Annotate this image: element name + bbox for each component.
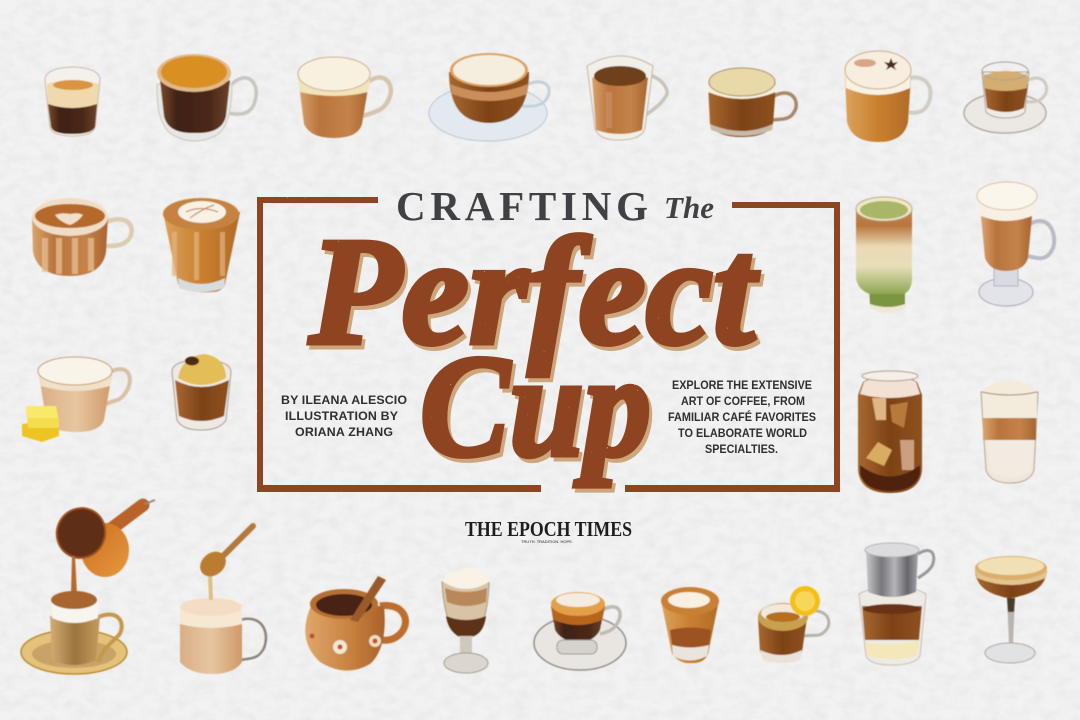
- cup: honey latte with dipper: [180, 526, 266, 674]
- byline: BY ILEANA ALESCIO: [281, 393, 407, 407]
- cup: coffee with lemon slice: [758, 586, 829, 663]
- cup: espresso martini: [975, 556, 1047, 663]
- title frame: [257, 197, 840, 492]
- logo: The Epoch Times: TRUTH. TRADITION. HOPE.: [521, 539, 573, 544]
- cup: espresso glass: [45, 67, 100, 136]
- heading: Crafting The: CRAFTING: [396, 183, 648, 229]
- intro text: TO ELABORATE WORLD: [678, 428, 807, 440]
- icon: phin filter: [865, 543, 934, 597]
- cup: affogato: [172, 354, 231, 430]
- title main lettering: Perfect: [308, 207, 759, 377]
- cup: small espresso on saucer: [964, 62, 1047, 133]
- cup: layered latte macchiato: [981, 380, 1038, 483]
- title main lettering: [308, 207, 759, 487]
- byline: ORIANA ZHANG: [295, 425, 393, 439]
- cup: flat white mug: [298, 57, 391, 138]
- intro text: [668, 380, 816, 456]
- byline: [281, 393, 407, 439]
- byline: ILLUSTRATION BY: [285, 409, 399, 423]
- logo: The Epoch Times: THE EPOCH TIMES: [465, 517, 632, 541]
- cup: tall glass mug: [587, 56, 667, 140]
- cup: turkish coffee poured from cezve: [21, 500, 155, 674]
- title shadow: Perfect: [311, 211, 762, 381]
- cup: matcha latte: [856, 197, 912, 313]
- cup: latte art tumbler: [163, 198, 240, 292]
- cup: butter coffee with butter cubes: [22, 357, 130, 442]
- title: Perfect Cup: [308, 207, 762, 491]
- cup: vienna coffee with whipped cream: [442, 567, 489, 673]
- cup: iced coffee can glass: [858, 371, 922, 493]
- cup: double-wall glass black coffee: [157, 54, 256, 141]
- cup: espresso on saucer: [534, 592, 626, 670]
- title shadow: Cup: [423, 329, 654, 491]
- intro text: ART OF COFFEE, FROM: [681, 396, 805, 408]
- icon: honey dipper: [195, 526, 253, 581]
- heading: Crafting The: The: [664, 190, 714, 225]
- cup: irish coffee glass: [977, 182, 1054, 306]
- title shadow: [311, 211, 762, 491]
- icon: lemon slice: [790, 586, 820, 616]
- intro text: SPECIALTIES.: [705, 444, 778, 456]
- icon: cezve pot: [49, 500, 155, 577]
- cup: spiced latte with star anise: [845, 51, 931, 142]
- cup: cappuccino with glass saucer: [429, 53, 549, 141]
- intro text: EXPLORE THE EXTENSIVE: [672, 380, 812, 392]
- cup: low glass latte mug: [708, 68, 796, 137]
- cup: vietnamese phin coffee: [859, 543, 934, 665]
- icon: butter cubes: [22, 406, 59, 442]
- cup: cortado glass: [661, 587, 719, 663]
- intro text: FAMILIAR CAFÉ FAVORITES: [668, 411, 816, 424]
- cup: cafe de olla clay mug: [305, 576, 406, 671]
- cup: ribbed latte mug with heart: [32, 198, 132, 276]
- title main lettering: Cup: [420, 325, 651, 487]
